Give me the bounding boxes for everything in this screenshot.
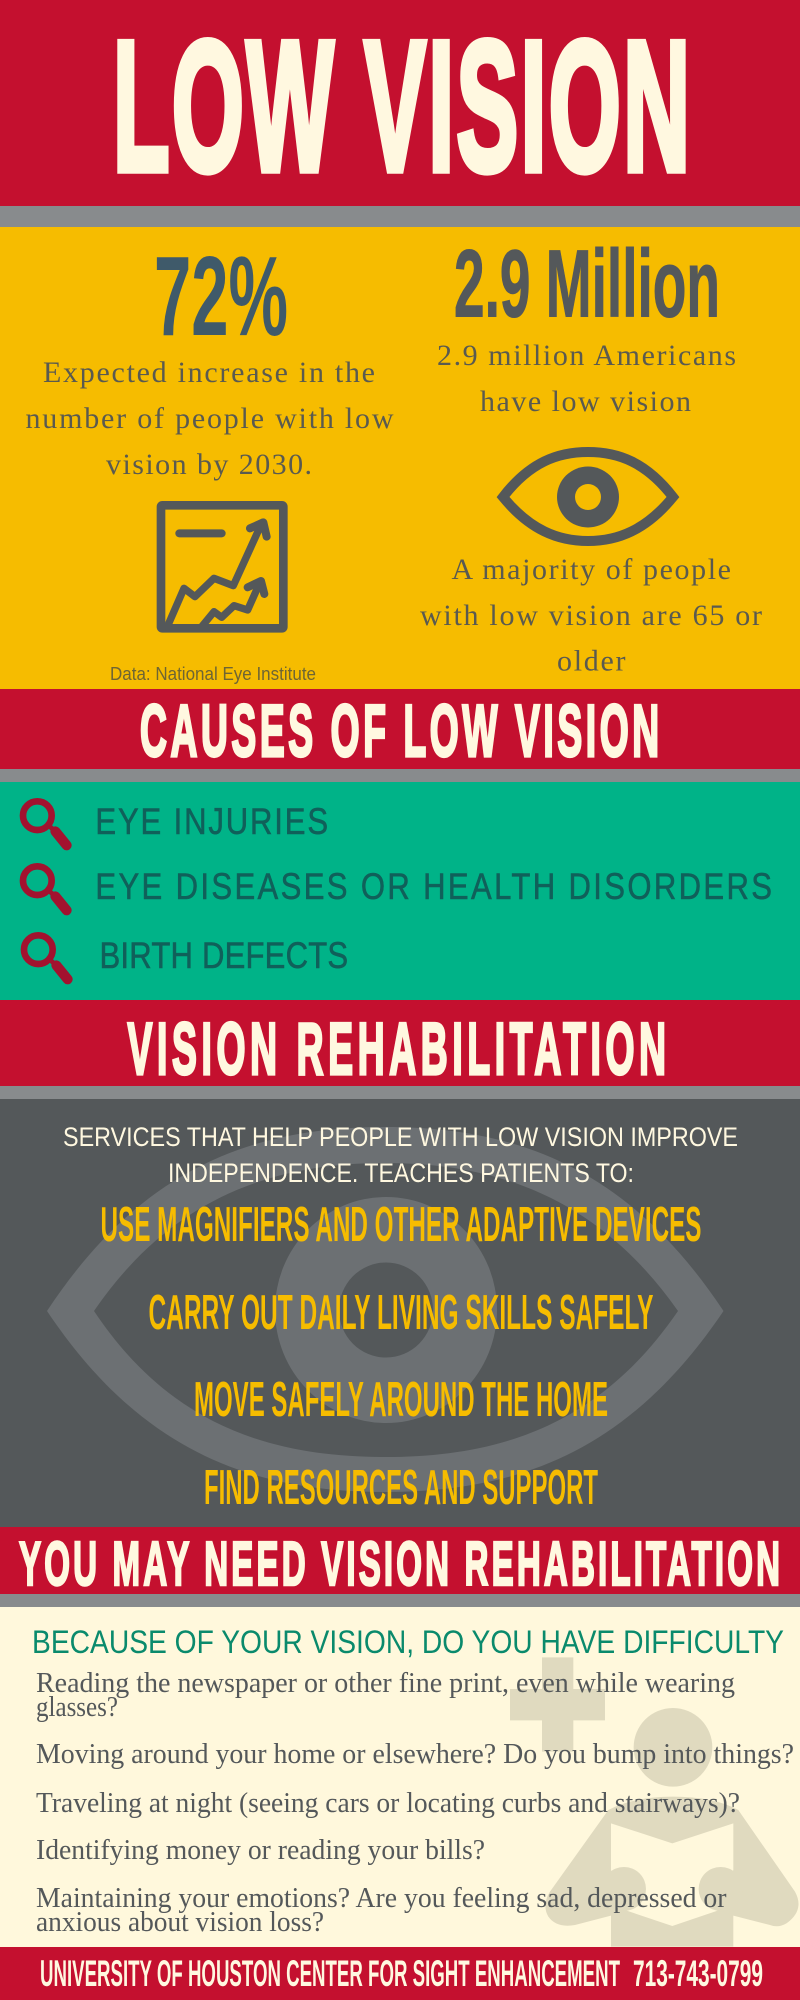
text: expected increase: number of people with low bbox=[26, 402, 394, 435]
question: reading: glasses? bbox=[36, 1692, 118, 1723]
stat: 72 percent: 72% bbox=[154, 233, 288, 359]
text: expected increase: vision by 2030. bbox=[106, 448, 312, 481]
text: expected increase: Expected increase in the bbox=[43, 356, 375, 389]
question: moving: Moving around your home or elsewhere? Do you bump into things? bbox=[36, 1739, 794, 1770]
panel: checklist bbox=[0, 1607, 800, 1947]
intro text bbox=[63, 1122, 738, 1188]
heading: you may need vision rehabilitation: YOU MAY NEED VISION REHABILITATION bbox=[19, 1529, 780, 1599]
panel: you may need heading bbox=[0, 1527, 800, 1599]
panel: statistics bbox=[0, 227, 800, 689]
question: emotions bbox=[36, 1883, 727, 1938]
title: LOW VISION bbox=[113, 3, 690, 209]
text: majority: A majority of people bbox=[452, 553, 731, 586]
intro text: INDEPENDENCE. TEACHES PATIENTS TO: bbox=[168, 1158, 634, 1188]
cause: birth defects: BIRTH DEFECTS bbox=[100, 936, 348, 977]
icon: rising chart bbox=[161, 505, 283, 628]
icon: magnifier 2 bbox=[23, 866, 67, 910]
panel: footer bbox=[0, 1947, 800, 2000]
icon: magnifier 3 bbox=[24, 935, 68, 979]
watermark: eye bbox=[47, 1127, 724, 1492]
text: americans bbox=[437, 339, 736, 418]
panel: rehabilitation services bbox=[0, 1099, 800, 1527]
question: traveling: Traveling at night (seeing cars or locating curbs and stairways)? bbox=[36, 1788, 740, 1819]
panel: title banner bbox=[0, 0, 800, 209]
heading: causes of low vision: CAUSES OF LOW VISION bbox=[140, 692, 659, 772]
text: majority: older bbox=[557, 644, 626, 678]
icon: magnifier 1 bbox=[23, 801, 67, 845]
watermark: cross and reading person bbox=[510, 1657, 798, 1947]
source note: Data: National Eye Institute bbox=[110, 664, 316, 684]
panel: rehabilitation heading bbox=[0, 1000, 800, 1090]
question: reading bbox=[36, 1668, 735, 1723]
cause: eye diseases: EYE DISEASES OR HEALTH DISORDERS bbox=[95, 867, 772, 908]
panel: causes heading bbox=[0, 689, 800, 772]
text: majority bbox=[420, 553, 762, 678]
text: americans: 2.9 million Americans bbox=[437, 339, 736, 372]
text: expected increase bbox=[26, 356, 394, 481]
text: americans: have low vision bbox=[480, 385, 691, 418]
cause: eye injuries: EYE INJURIES bbox=[95, 802, 328, 843]
panel: causes list bbox=[0, 782, 800, 1000]
heading: vision rehabilitation: VISION REHABILITATION bbox=[128, 1010, 666, 1090]
question: emotions: anxious about vision loss? bbox=[36, 1907, 324, 1938]
question: emotions: Maintaining your emotions? Are you feeling sad, depressed or bbox=[36, 1883, 727, 1914]
icon: eye bbox=[503, 452, 673, 541]
question: money: Identifying money or reading your bills? bbox=[36, 1835, 485, 1866]
question: reading: Reading the newspaper or other fine print, even while wearing bbox=[36, 1668, 735, 1699]
text: majority: with low vision are 65 or bbox=[420, 599, 762, 632]
